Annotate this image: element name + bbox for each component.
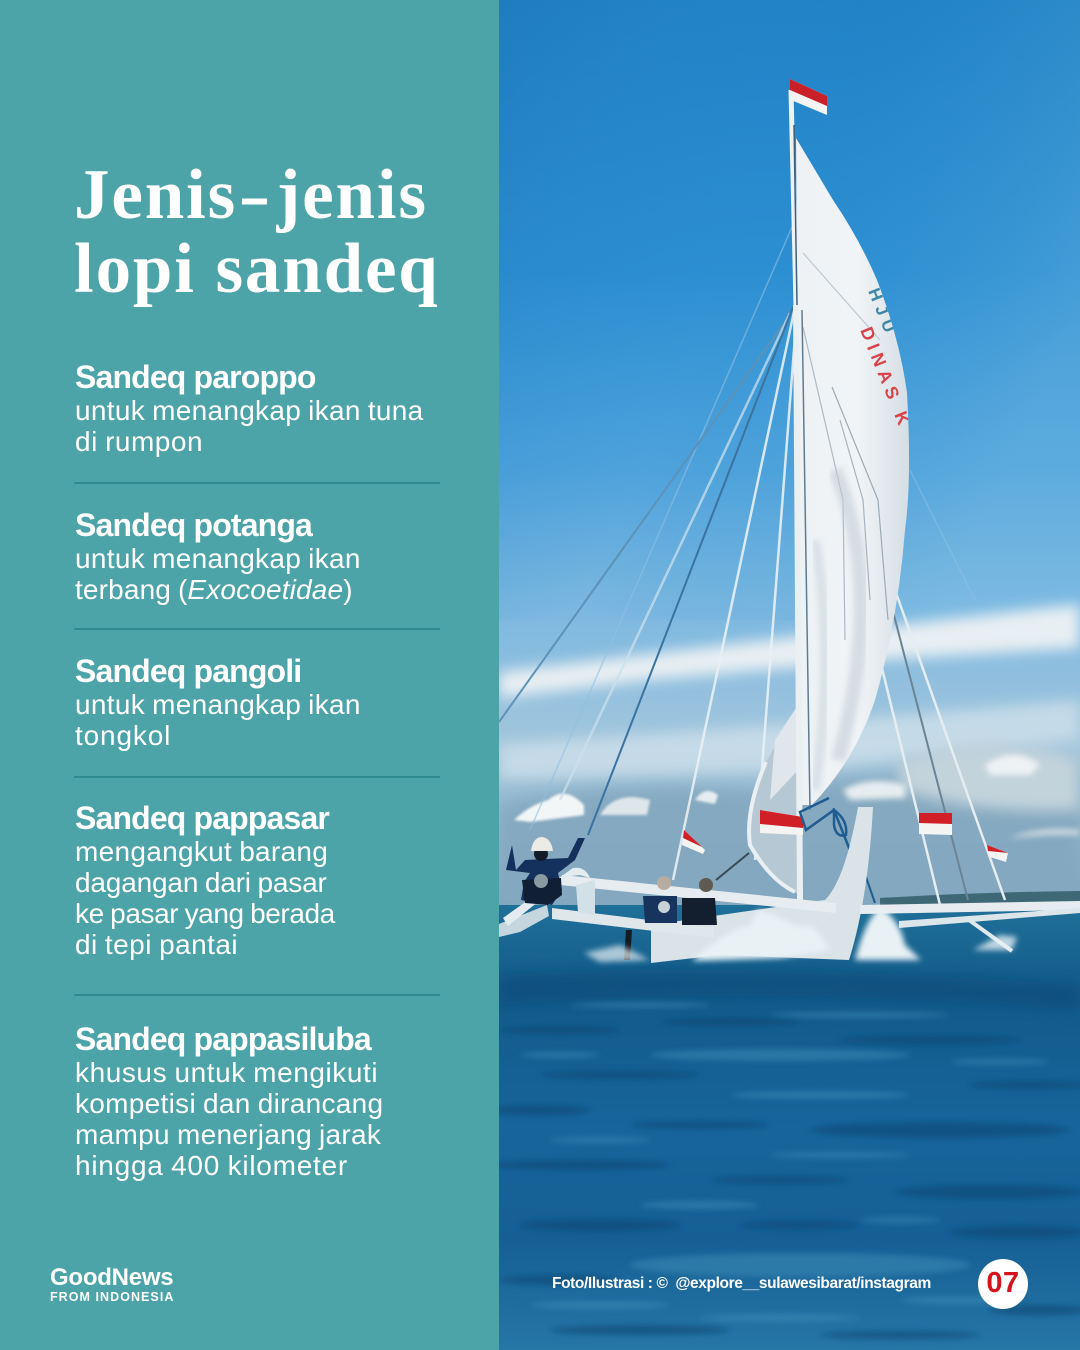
title: Jenis jenis [74, 156, 428, 234]
page number badge: 07 [986, 1267, 1020, 1299]
title [74, 156, 440, 308]
item: Sandeq pappasar: mengangkut barang [75, 836, 328, 867]
logo: GoodNews from Indonesia: GoodNews [50, 1264, 173, 1291]
main sail: HJU [864, 285, 901, 341]
item: Sandeq pappasiluba: mampu menerjang jarak [75, 1119, 381, 1150]
hull and outriggers [499, 807, 1080, 963]
sea [490, 905, 1080, 1350]
item: Sandeq potanga [75, 507, 361, 605]
logo: GoodNews from Indonesia: FROM INDONESIA [50, 1290, 174, 1304]
item: Sandeq pangoli [75, 653, 361, 751]
item: Sandeq pappasiluba: kompetisi dan dirancang [75, 1088, 383, 1119]
item: Sandeq potanga: Sandeq potanga [75, 507, 312, 543]
item: Sandeq pappasiluba: Sandeq pappasiluba [75, 1021, 371, 1057]
sky [499, 0, 1080, 910]
item: Sandeq pangoli: tongkol [75, 720, 171, 751]
main sail [796, 138, 916, 805]
item: Sandeq paroppo: Sandeq paroppo [75, 359, 316, 395]
mast and top flag [790, 79, 827, 900]
item: Sandeq pappasar: di tepi pantai [75, 929, 238, 960]
page number badge [978, 1259, 1028, 1309]
item: Sandeq potanga: untuk menangkap ikan [75, 543, 361, 574]
logo: GoodNews from Indonesia [50, 1264, 174, 1304]
ropes [716, 798, 875, 903]
item: Sandeq pappasiluba: khusus untuk mengikuti [75, 1057, 378, 1088]
item: Sandeq pangoli: untuk menangkap ikan [75, 689, 361, 720]
photo credit: Foto/Ilustrasi : © @explore__sulawesibarat/instagram [552, 1275, 931, 1292]
item: Sandeq potanga: terbang (Exocoetidae) [75, 574, 353, 605]
item: Sandeq pappasar [75, 800, 336, 960]
item: Sandeq pappasar: Sandeq pappasar [75, 800, 329, 836]
item: Sandeq pangoli: Sandeq pangoli [75, 653, 301, 689]
panel: text column [0, 0, 499, 1350]
item: Sandeq pappasiluba [75, 1021, 383, 1181]
item: Sandeq pappasiluba: hingga 400 kilometer [75, 1150, 348, 1181]
item: Sandeq paroppo [75, 359, 424, 457]
title: - [239, 156, 273, 234]
item: Sandeq pappasar: ke pasar yang berada [75, 898, 335, 929]
water splash [584, 907, 1017, 962]
item: Sandeq pappasar: dagangan dari pasar [75, 867, 327, 898]
item: Sandeq paroppo: untuk menangkap ikan tuna [75, 395, 424, 426]
title: lopi sandeq [74, 230, 440, 308]
photo: sandeq sailboat at sea [499, 0, 1080, 1350]
main sail: DINAS K [856, 324, 916, 433]
item: Sandeq paroppo: di rumpon [75, 426, 203, 457]
sailors [506, 837, 717, 960]
jib sail [749, 700, 802, 895]
small flags [682, 810, 1008, 862]
rigging lines [499, 227, 1005, 905]
